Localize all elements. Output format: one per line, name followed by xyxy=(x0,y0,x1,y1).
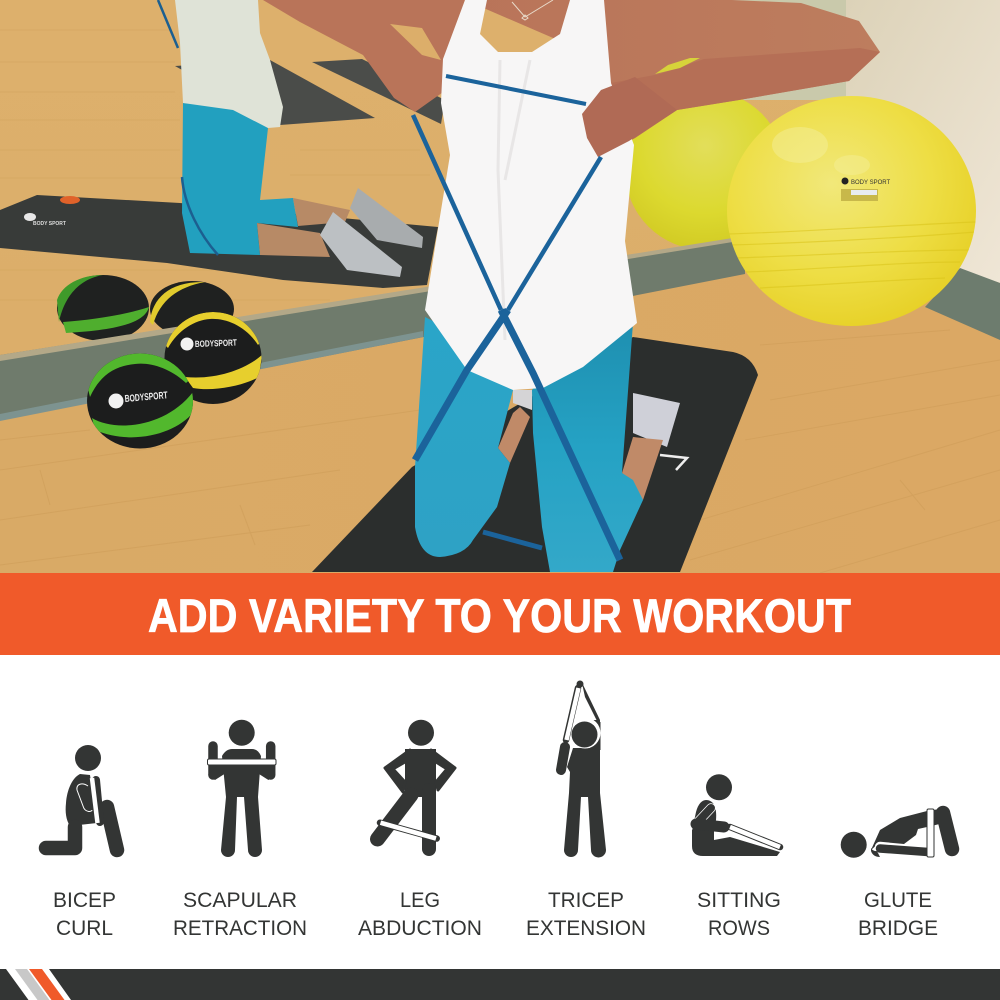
title: ADD VARIETY TO YOUR WORKOUT xyxy=(148,589,851,642)
reflected background mats xyxy=(175,60,375,125)
white tank top xyxy=(425,0,637,390)
skin: arms, chest xyxy=(263,0,880,140)
headline band xyxy=(0,573,1000,655)
medicine ball: green xyxy=(87,353,195,448)
ball label: BODY SPORT xyxy=(851,180,890,186)
reflected floor xyxy=(0,0,846,356)
reflected shirt xyxy=(175,0,283,128)
gap between arms xyxy=(655,58,700,74)
label: SITTING xyxy=(697,889,781,912)
ball label xyxy=(841,178,890,201)
icon: tricep extension xyxy=(561,680,606,858)
hand over band, right xyxy=(582,77,677,157)
label: TRICEP xyxy=(548,889,624,912)
baseboard below mirror xyxy=(0,238,745,420)
label xyxy=(526,889,646,940)
reflected yellow exercise ball xyxy=(629,100,770,246)
reflected main mat xyxy=(0,195,438,288)
label xyxy=(53,889,116,940)
reflected mat logo xyxy=(24,196,80,227)
shoe far xyxy=(633,393,680,447)
icon: glute bridge xyxy=(841,808,952,858)
label xyxy=(173,889,307,940)
mirror reflection xyxy=(0,0,846,356)
label xyxy=(858,889,938,940)
photo: woman kneeling with resistance band xyxy=(0,0,1000,573)
label: CURL xyxy=(56,917,113,940)
necklace xyxy=(512,0,553,20)
icon: sitting rows xyxy=(692,774,780,856)
label: EXTENSION xyxy=(526,917,646,940)
reflected medicine ball: green xyxy=(57,275,149,341)
exercise: tricep extension xyxy=(526,680,646,940)
resistance band xyxy=(413,76,620,560)
label: RETRACTION xyxy=(173,917,307,940)
gym floor xyxy=(0,269,1000,573)
label xyxy=(358,889,482,940)
shoe near xyxy=(513,390,532,410)
ball logo: BODYSPORT xyxy=(124,390,168,405)
baseboard on wall xyxy=(925,268,1000,340)
label: BRIDGE xyxy=(858,917,938,940)
reflected medicine ball: yellow xyxy=(150,281,234,329)
label: ABDUCTION xyxy=(358,917,482,940)
label: GLUTE xyxy=(864,889,932,912)
footer bar with stripes xyxy=(0,969,1000,1000)
label: ROWS xyxy=(708,917,770,940)
reflected shoes xyxy=(350,188,423,248)
exercise: bicep curl xyxy=(46,745,117,940)
exercise: sitting rows xyxy=(692,774,781,940)
main mat xyxy=(312,337,758,572)
reflected band xyxy=(158,0,218,255)
icon: leg abduction xyxy=(378,720,455,849)
shoelaces xyxy=(660,455,687,470)
exercise: glute bridge xyxy=(841,808,952,940)
legs in teal leggings xyxy=(415,317,643,572)
exercise: leg abduction xyxy=(358,720,482,940)
wall xyxy=(846,0,1000,283)
label: BICEP xyxy=(53,889,116,912)
label: SCAPULAR xyxy=(183,889,297,912)
reflected calves xyxy=(257,198,350,257)
label: LEG xyxy=(400,889,440,912)
label xyxy=(697,889,781,940)
ball logo: BODYSPORT xyxy=(195,338,237,349)
reflected wall xyxy=(734,0,846,100)
big yellow exercise ball xyxy=(727,96,976,326)
reflected mat logo: BODY SPORT xyxy=(33,221,66,227)
icon: scapular retraction xyxy=(208,720,276,857)
reflected person legs xyxy=(182,103,298,255)
icon: bicep curl xyxy=(46,745,117,850)
medicine ball: yellow xyxy=(164,312,262,404)
exercise: scapular retraction xyxy=(173,720,307,940)
calves xyxy=(498,407,663,500)
